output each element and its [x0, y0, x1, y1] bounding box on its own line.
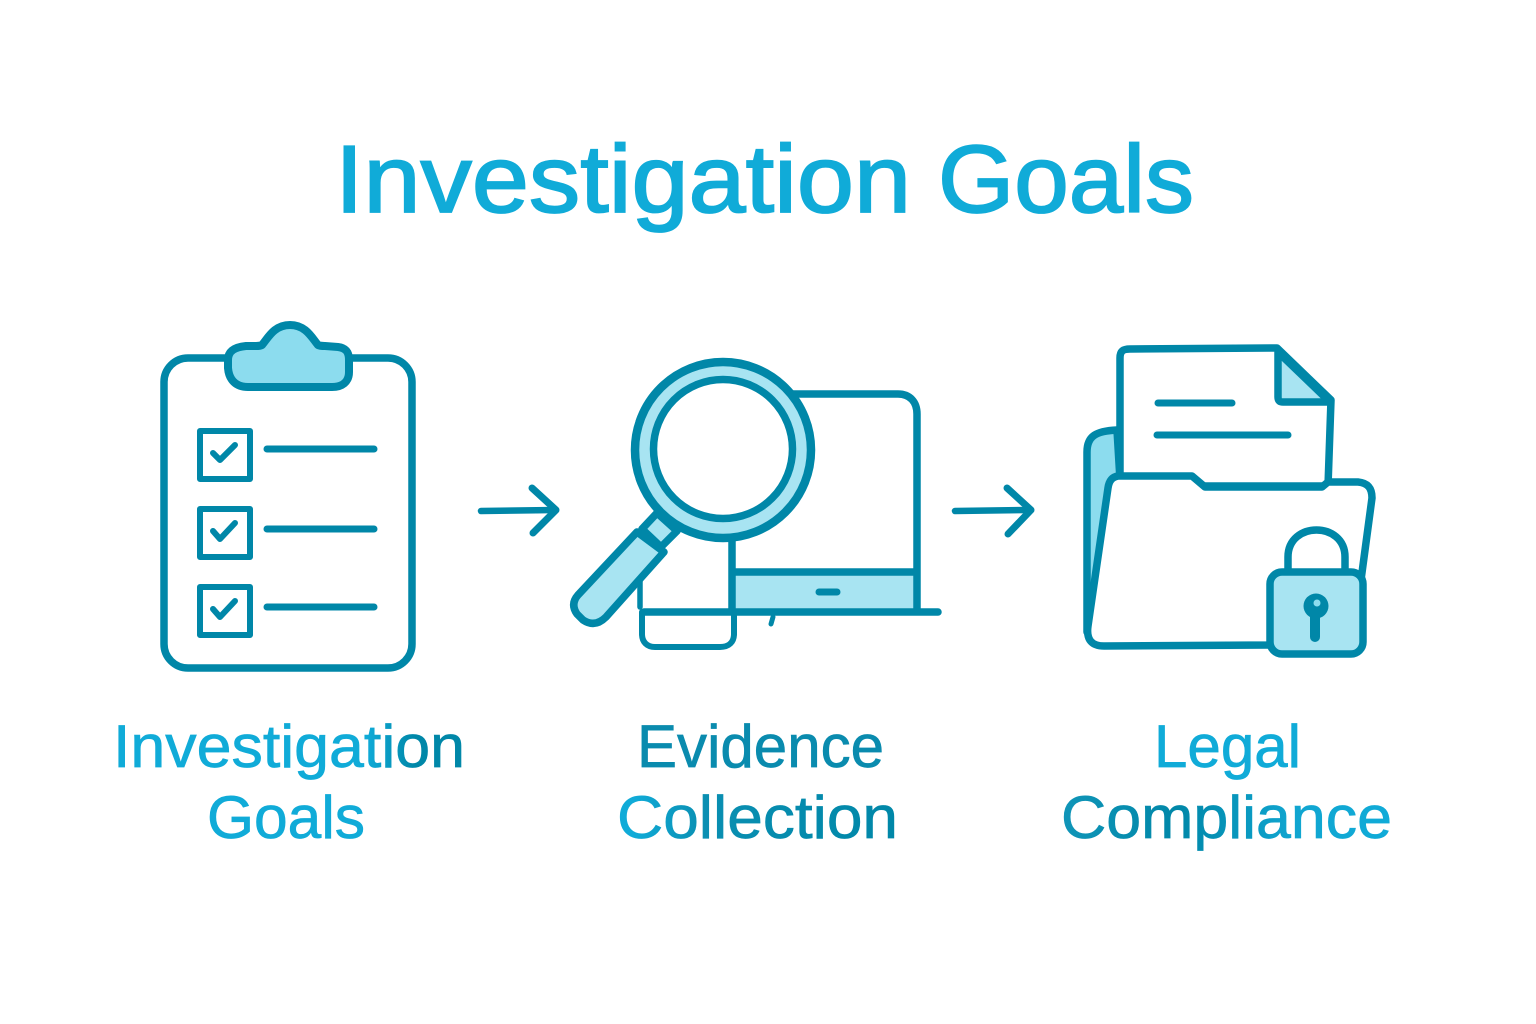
document — [1120, 348, 1331, 486]
icon: folder with document and padlock — [1087, 348, 1372, 654]
phone — [640, 580, 734, 647]
title — [335, 126, 1194, 233]
title: Investigation — [335, 126, 911, 233]
back folder — [1087, 430, 1120, 632]
icon: clipboard checklist — [164, 325, 412, 668]
checkbox row 3 — [200, 587, 374, 635]
arrow: goals to evidence — [481, 488, 556, 533]
checkbox row 2 — [200, 509, 374, 557]
label: investigation goals — [113, 713, 465, 851]
label: evidence collection — [617, 713, 898, 851]
checkbox row 1 — [200, 431, 374, 479]
label: evidence collection: Collection — [617, 784, 898, 851]
label: legal compliance — [1061, 713, 1392, 851]
padlock — [1270, 530, 1363, 654]
label: legal compliance: Compliance — [1061, 784, 1392, 851]
front folder — [1088, 476, 1372, 646]
arrow: evidence to legal — [955, 488, 1031, 534]
icon: magnifier over laptop and phone — [574, 362, 938, 647]
label: investigation goals: Investigation — [113, 713, 465, 780]
clipboard board — [164, 358, 412, 668]
magnifier — [574, 362, 811, 623]
laptop — [644, 394, 938, 624]
label: evidence collection: Evidence — [637, 713, 884, 780]
clipboard clip — [228, 325, 349, 387]
label: investigation goals: Goals — [207, 784, 365, 851]
label: legal compliance: Legal — [1154, 713, 1301, 780]
title: Goals — [938, 126, 1194, 233]
